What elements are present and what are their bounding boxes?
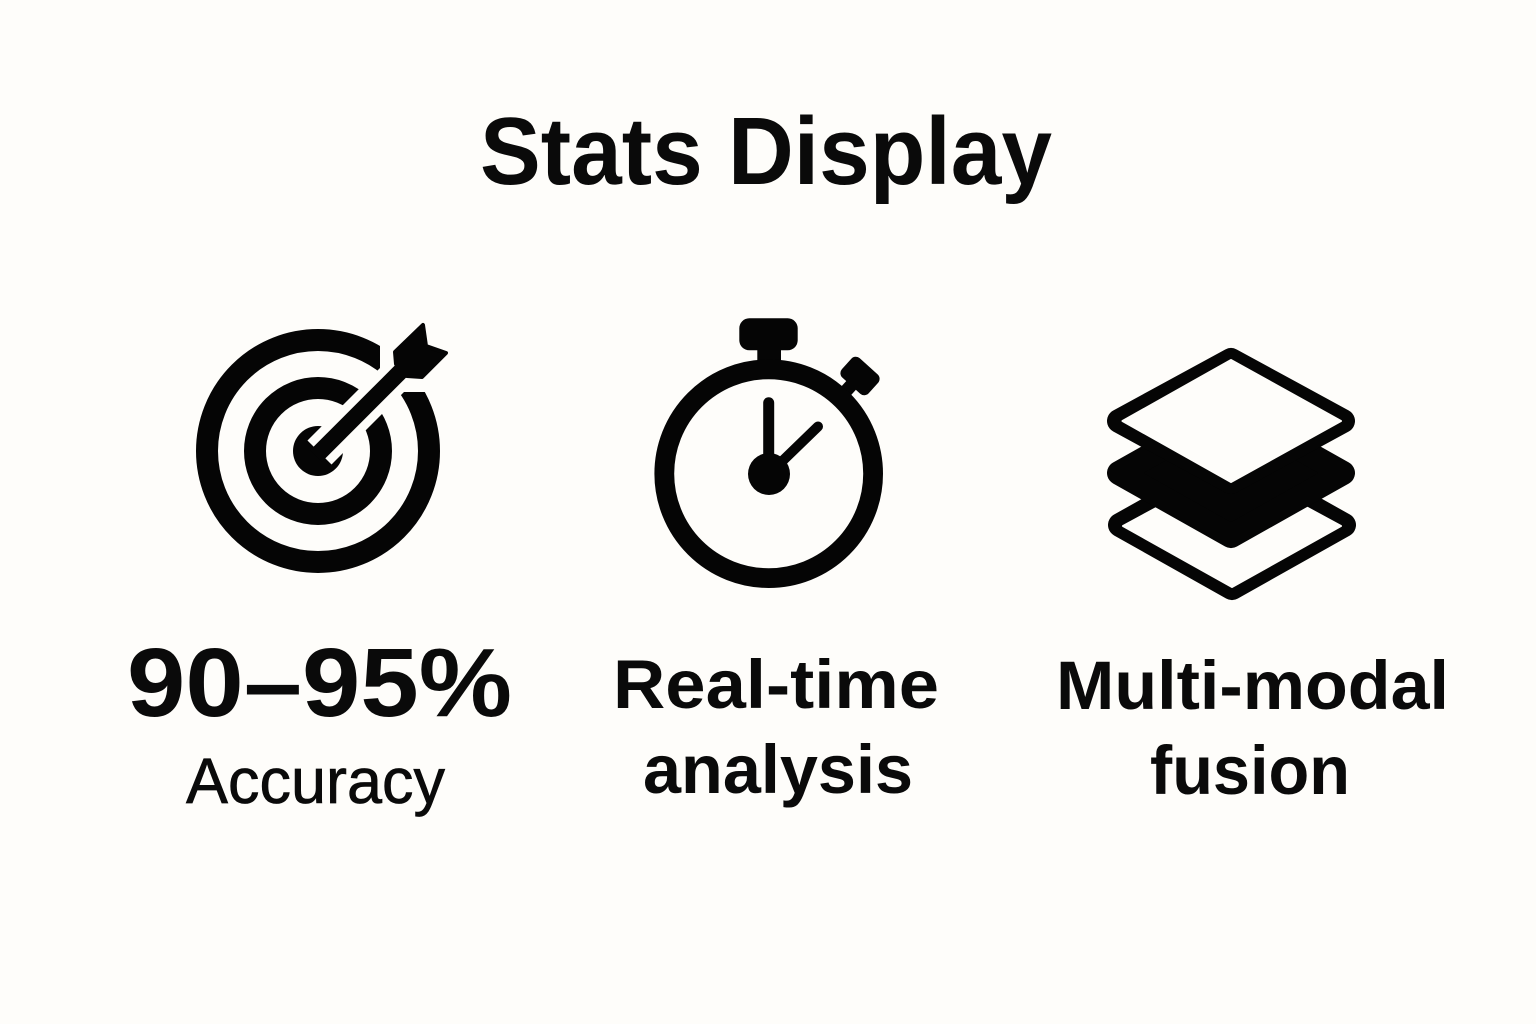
stat title: Real-time <box>613 646 939 723</box>
stat value: 90–95% <box>127 628 512 737</box>
panel: accuracy <box>127 325 512 817</box>
panel: multi-modal fusion <box>1056 360 1449 809</box>
icon: target with arrow <box>207 325 460 562</box>
stat subtitle: fusion <box>1150 732 1350 809</box>
stat label: Accuracy <box>186 745 445 817</box>
panel: real-time analysis <box>613 318 939 808</box>
icon: stopwatch <box>664 318 882 578</box>
title: Stats Display <box>480 98 1052 205</box>
icon: stacked layers <box>1119 360 1344 588</box>
stat title: Multi-modal <box>1056 647 1449 724</box>
stat subtitle: analysis <box>643 731 913 808</box>
